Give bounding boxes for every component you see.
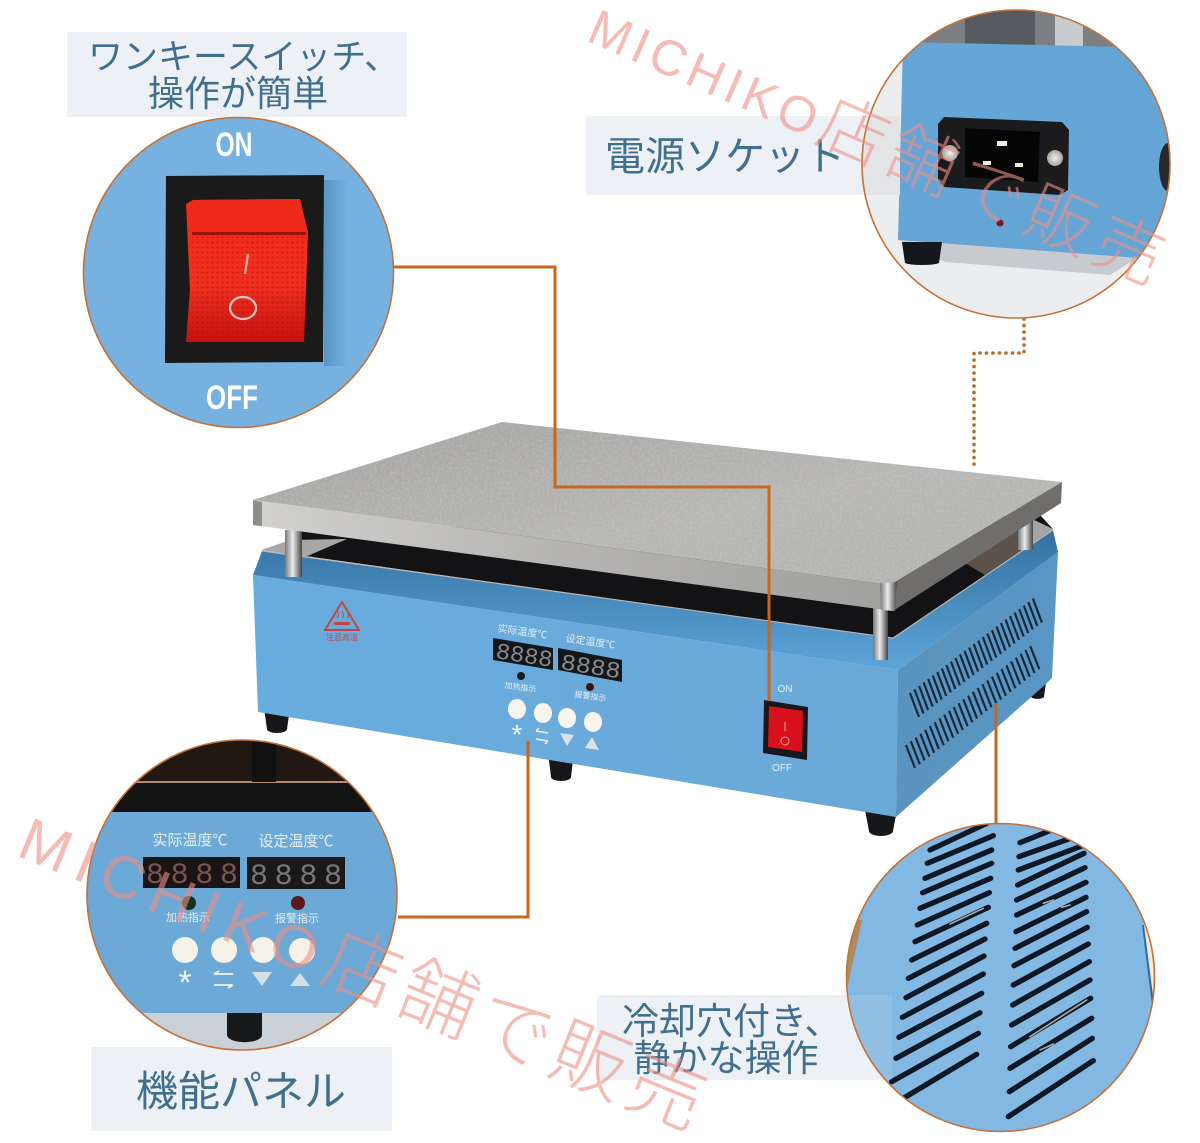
digital displays: 8888: [250, 860, 342, 894]
indicator lights: [166, 896, 319, 925]
front control panel: 8888: [494, 639, 554, 674]
connector arrow: panel callout to control panel: [398, 741, 528, 917]
callout circle: control panel close-up: [80, 740, 410, 1050]
connector arrow: switch callout to power switch: [393, 267, 769, 701]
device body: top surface: [253, 530, 1058, 670]
main power switch: ON: [778, 684, 792, 695]
ON text: ON: [216, 126, 252, 164]
OFF text: OFF: [206, 379, 258, 417]
label box: one-key switch: [67, 32, 407, 117]
callout circle: control panel close-up: 设定温度℃: [258, 833, 334, 850]
callout circle: rocker switch close-up: [84, 118, 394, 428]
thin lower plate and under-plate shadow: [262, 515, 1053, 638]
panel headings: 实际温度℃: [152, 832, 228, 849]
front control panel: *: [512, 719, 523, 750]
label box: cooling holes: 冷却穴付き、: [622, 1001, 841, 1042]
product: hot plate device: [253, 422, 1062, 836]
digital displays: [143, 857, 345, 894]
control buttons: [172, 937, 315, 964]
button symbols: [178, 964, 310, 1002]
warning triangle: 注意高温: [326, 632, 358, 642]
watermark: bottom: MICHIKO店舗で販売: [9, 792, 723, 1143]
side cooling vents: [906, 598, 1042, 768]
front control panel: [493, 622, 622, 750]
support posts: [285, 520, 1033, 660]
front control panel: 8888: [559, 650, 622, 685]
vent slots: [892, 823, 1093, 1117]
device body: side face: [896, 552, 1058, 817]
device body: front face: [253, 575, 898, 817]
digital displays: 8888: [146, 859, 238, 893]
plate edges: [253, 500, 893, 611]
label box: cooling holes: 静かな操作: [634, 1038, 818, 1079]
indicator lights: 加热指示: [166, 910, 210, 924]
top heating plate: [253, 422, 1062, 585]
front control panel: 设定温度℃: [565, 632, 616, 651]
front control panel: 实际温度℃: [497, 622, 548, 641]
connector arrow: dotted socket link: [974, 319, 1024, 466]
warning triangle: [325, 602, 359, 642]
label box: function panel: [91, 1047, 392, 1131]
watermark: top: MICHIKO店舗で販売: [579, 0, 1181, 303]
front control panel: 加热指示: [504, 680, 537, 694]
front control panel: 报警指示: [574, 689, 607, 703]
label box: function panel: 機能パネル: [136, 1068, 346, 1115]
device feet: [264, 675, 1047, 836]
label box: power socket: [586, 116, 926, 195]
label box: cooling holes: [597, 995, 892, 1080]
callout circle: cooling vents close-up: [844, 823, 1160, 1132]
switch red rocker: [186, 199, 308, 342]
label box: power socket: 電源ソケット: [605, 135, 845, 179]
indicator lights: 报警指示: [275, 911, 319, 925]
switch black bezel: [165, 175, 324, 363]
main power switch: OFF: [772, 763, 792, 774]
button symbols: *: [178, 964, 192, 1002]
callout circle: power socket close-up: [860, 0, 1180, 318]
label box: one-key switch: 操作が簡単: [148, 73, 328, 114]
socket body: [938, 117, 1069, 226]
connector arrow: vent callout to vents: [994, 703, 998, 826]
label box: one-key switch: ワンキースイッチ、: [88, 38, 399, 77]
main power switch: [763, 684, 808, 774]
